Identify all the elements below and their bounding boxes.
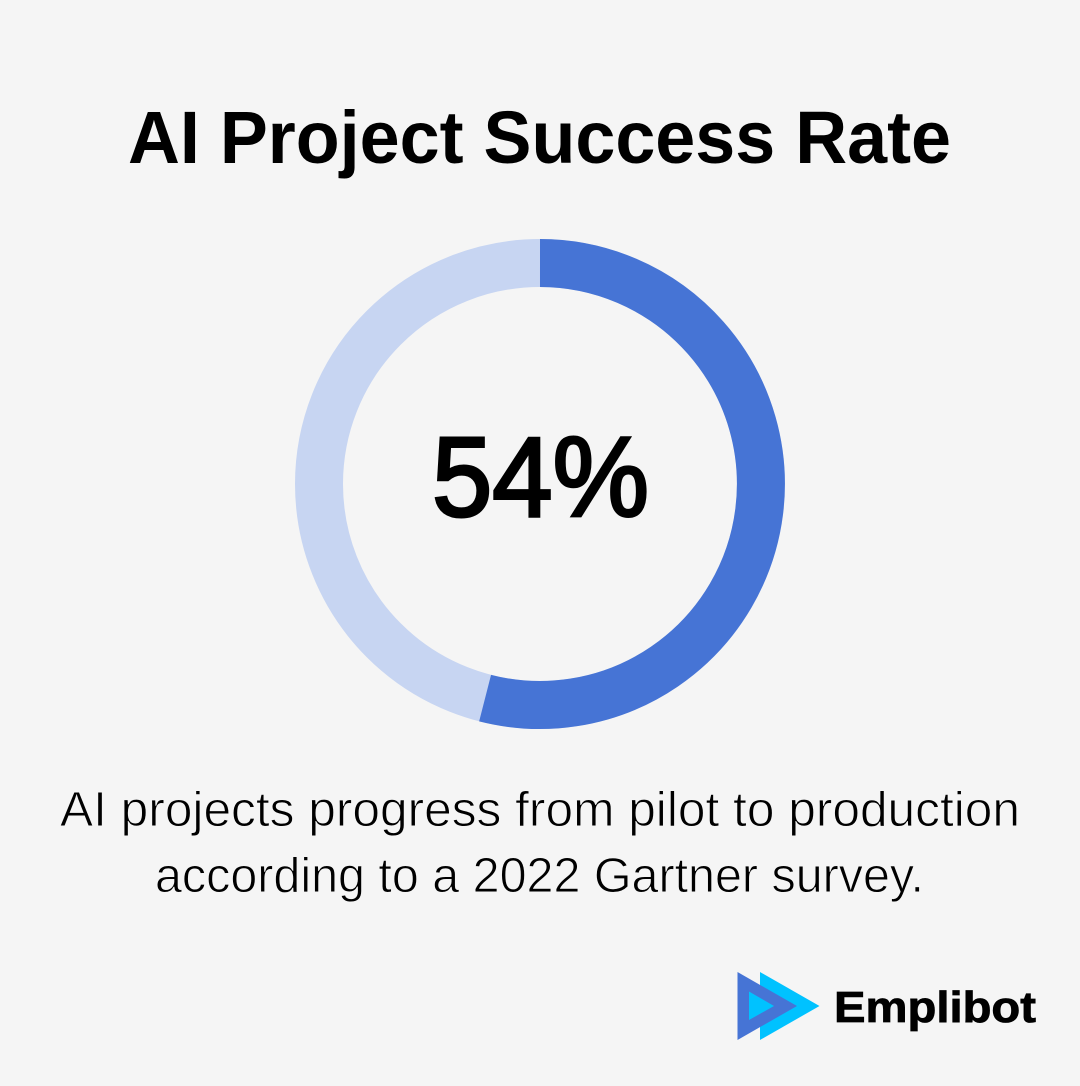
icon: play triangles: [738, 972, 820, 1040]
donut track: remaining 46 percent: [319, 263, 761, 705]
description text: [60, 783, 1020, 903]
description line 2: according to a 2022 Gartner survey.: [155, 849, 924, 903]
donut segment: 54 percent: [485, 263, 761, 705]
logo wordmark: Emplibot: [834, 983, 1036, 1032]
center value: 54%: [432, 414, 649, 540]
description line 1: AI projects progress from pilot to production: [60, 783, 1020, 837]
logo: Emplibot: [738, 972, 1036, 1040]
title: AI Project Success Rate: [128, 96, 951, 179]
donut chart: 54 percent: [319, 263, 761, 705]
